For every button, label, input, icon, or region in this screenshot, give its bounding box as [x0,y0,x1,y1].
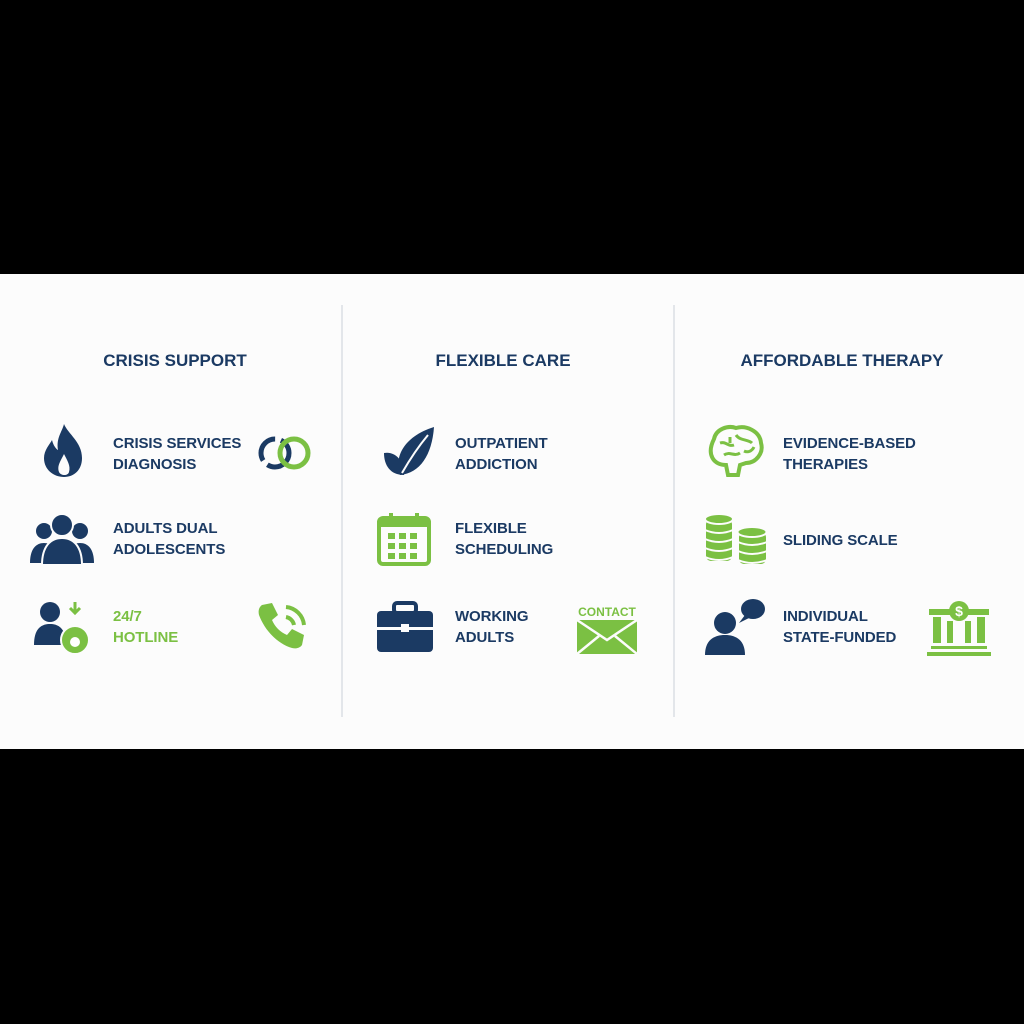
text: working adults: WORKING [455,608,528,625]
text: 24/7 hotline [113,608,178,646]
icon: person with download [34,602,88,653]
text: flexible scheduling: SCHEDULING [455,541,553,558]
text: outpatient addiction [455,435,548,473]
text: evidence-based therapies: EVIDENCE-BASED [783,435,916,452]
text: flexible scheduling: FLEXIBLE [455,520,527,537]
text: individual state-funded: INDIVIDUAL [783,608,868,625]
text: crisis services diagnosis: CRISIS SERVICES [113,435,241,452]
text: flexible scheduling [455,520,553,558]
icon: bank with dollar [927,601,991,656]
icon: person with speech bubble [705,599,765,655]
text: working adults [455,608,528,646]
text: outpatient addiction: ADDICTION [455,456,537,473]
text: outpatient addiction: OUTPATIENT [455,435,548,452]
icon: bank with dollar: $ [955,603,963,619]
heading: crisis support: CRISIS SUPPORT [103,351,247,370]
white panel [0,274,1024,749]
icon: flame [44,424,82,477]
icon: group of people [30,515,94,564]
text: crisis services diagnosis [113,435,241,473]
text: evidence-based therapies [783,435,916,473]
icon: calendar [377,513,431,566]
text: 24/7 hotline: HOTLINE [113,629,178,646]
icon: phone [258,603,306,648]
heading: affordable therapy: AFFORDABLE THERAPY [740,351,944,370]
text: crisis services diagnosis: DIAGNOSIS [113,456,196,473]
icon: contact envelope: CONTACT [578,605,637,619]
heading: flexible care: FLEXIBLE CARE [435,351,571,370]
text: individual state-funded [783,608,896,646]
icon: briefcase [377,601,433,652]
text: adults dual adolescents [113,520,225,558]
text: individual state-funded: STATE-FUNDED [783,629,896,646]
icon: contact envelope [577,605,637,654]
text: adults dual adolescents: ADOLESCENTS [113,541,225,558]
icon: coin stacks [706,515,766,564]
text: evidence-based therapies: THERAPIES [783,456,868,473]
text: adults dual adolescents: ADULTS DUAL [113,520,217,537]
text: working adults: ADULTS [455,629,514,646]
icon: brain [708,424,764,477]
text: 24/7 hotline: 24/7 [113,608,142,625]
text: sliding scale: SLIDING SCALE [783,532,898,549]
icon: leaves [384,427,434,475]
icon: linked rings [258,436,310,470]
